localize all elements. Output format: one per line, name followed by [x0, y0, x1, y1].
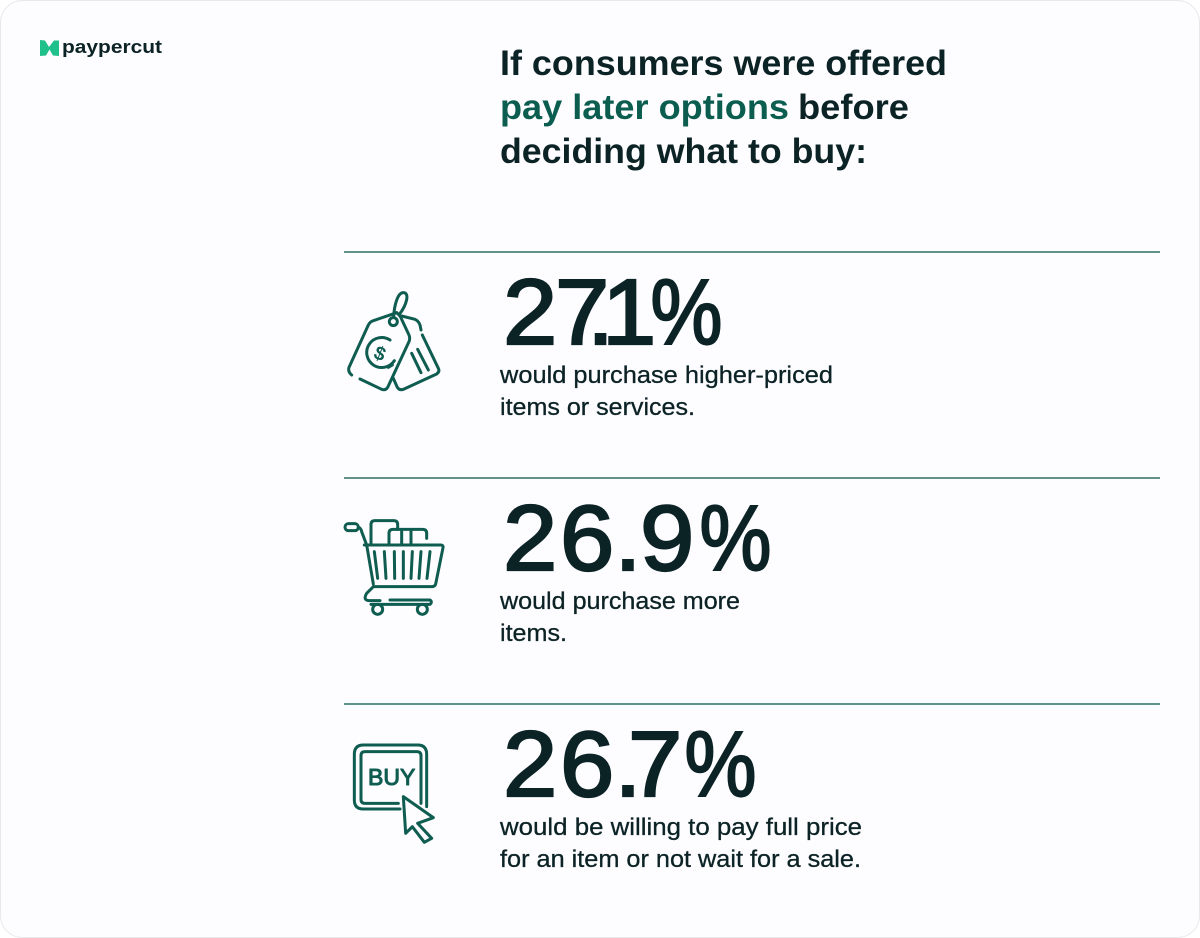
icon: buy button with cursor: BUY [368, 764, 415, 790]
stat: 27.1%: would purchase higher-priced [499, 362, 833, 389]
icon: shopping cart [345, 521, 443, 614]
stat: 26.7%: for an item or not wait for a sale. [500, 846, 861, 873]
stat: 27.1%: items or services. [500, 394, 695, 421]
title [500, 44, 947, 171]
icon: price tags [349, 293, 439, 390]
stat: 26.9% [499, 487, 771, 647]
stat: 26.9%: 26.9 [503, 487, 694, 590]
stat: 26.7%: % [684, 713, 756, 816]
logo wordmark: paypercut [62, 36, 162, 57]
title: deciding what to buy: [500, 132, 867, 171]
stat: 26.9%: items. [500, 620, 567, 647]
stat: 27.1%: % [650, 261, 722, 364]
stat: 26.7%: 26.7 [503, 713, 682, 816]
title: pay later options [500, 88, 789, 127]
stat: 27.1%: 27.1 [503, 261, 656, 364]
title: before [798, 88, 909, 127]
stat: 26.9%: % [700, 487, 771, 590]
stat: 26.9%: would purchase more [499, 588, 740, 615]
icon: price tags: $ [371, 343, 389, 366]
stat: 26.7% [499, 713, 862, 873]
stat: 26.7%: would be willing to pay full price [499, 814, 862, 841]
logo [40, 36, 162, 57]
icon: buy button with cursor [354, 745, 433, 842]
stat: 27.1% [499, 261, 833, 421]
logo mark [40, 40, 59, 56]
title: If consumers were offered [500, 44, 947, 83]
